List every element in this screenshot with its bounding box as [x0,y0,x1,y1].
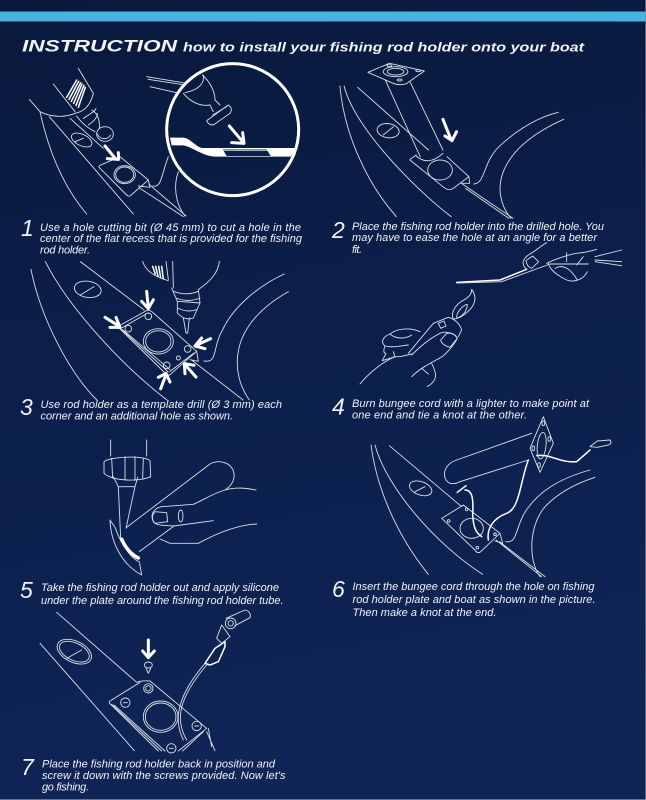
illustration 4: hand with cord and lighter [360,243,622,387]
step 2: 2 [331,217,345,243]
step 1: 1 [21,215,34,241]
illustration 3: drilling template [31,261,288,400]
step 1 [21,215,303,256]
step 6: rod holder plate and boat as shown in the picture. [352,594,596,606]
title: INSTRUCTION [22,36,178,56]
step 2 [331,217,604,256]
step 4: Burn bungee cord with a lighter to make point at [352,398,590,410]
step 4: one end and tie a knot at the other. [352,410,527,422]
step 7: screw it down with the screws provided. Now let's [42,770,286,782]
step 2: fit. [352,244,362,256]
step 1: Use a hole cutting bit (Ø 45 mm) to cut a hole in the [40,222,301,234]
illustration 2: placing the rod holder [340,63,564,218]
step 2: Place the fishing rod holder into the drilled hole. You [352,221,604,233]
step 4: 4 [332,394,345,420]
step 5: 5 [20,577,33,603]
step 5: under the plate around the fishing rod holder tube. [41,595,284,607]
silicone bead [122,539,138,558]
step 2: may have to ease the hole at an angle for a better [352,232,598,244]
title: how to install your fishing rod holder onto your boat [183,40,585,54]
step 1: rod holder. [40,244,90,256]
step 5: Take the fishing rod holder out and apply silicone [41,582,279,594]
step 6: 6 [332,576,345,602]
illustration 6: threading the bungee cord [371,417,611,577]
step 3: corner and an additional hole as shown. [40,410,233,422]
step 4 [332,394,590,422]
top blue bar [0,12,646,22]
arrows [142,291,153,309]
step 6: Insert the bungee cord through the hole on fishing [352,581,595,593]
step 3: 3 [20,394,33,420]
step 1: center of the flat recess that is provided for the fishing [40,233,303,245]
step 7: 7 [21,754,35,780]
step 5 [20,577,284,607]
step 3 [20,394,282,422]
step 6 [332,576,596,619]
arrow [105,146,119,159]
illustration 5: applying silicone [104,440,257,575]
illustration 7: screwing down [40,610,250,753]
step 3: Use rod holder as a template drill (Ø 3 mm) each [40,399,282,411]
magnifier circle [147,64,299,196]
step 7: Place the fishing rod holder back in position and [42,758,276,770]
step 7: go fishing. [42,782,89,794]
illustration 1: hole cutting [29,64,299,217]
title [22,36,585,56]
step 6: Then make a knot at the end. [352,607,496,619]
step 7 [21,754,286,794]
